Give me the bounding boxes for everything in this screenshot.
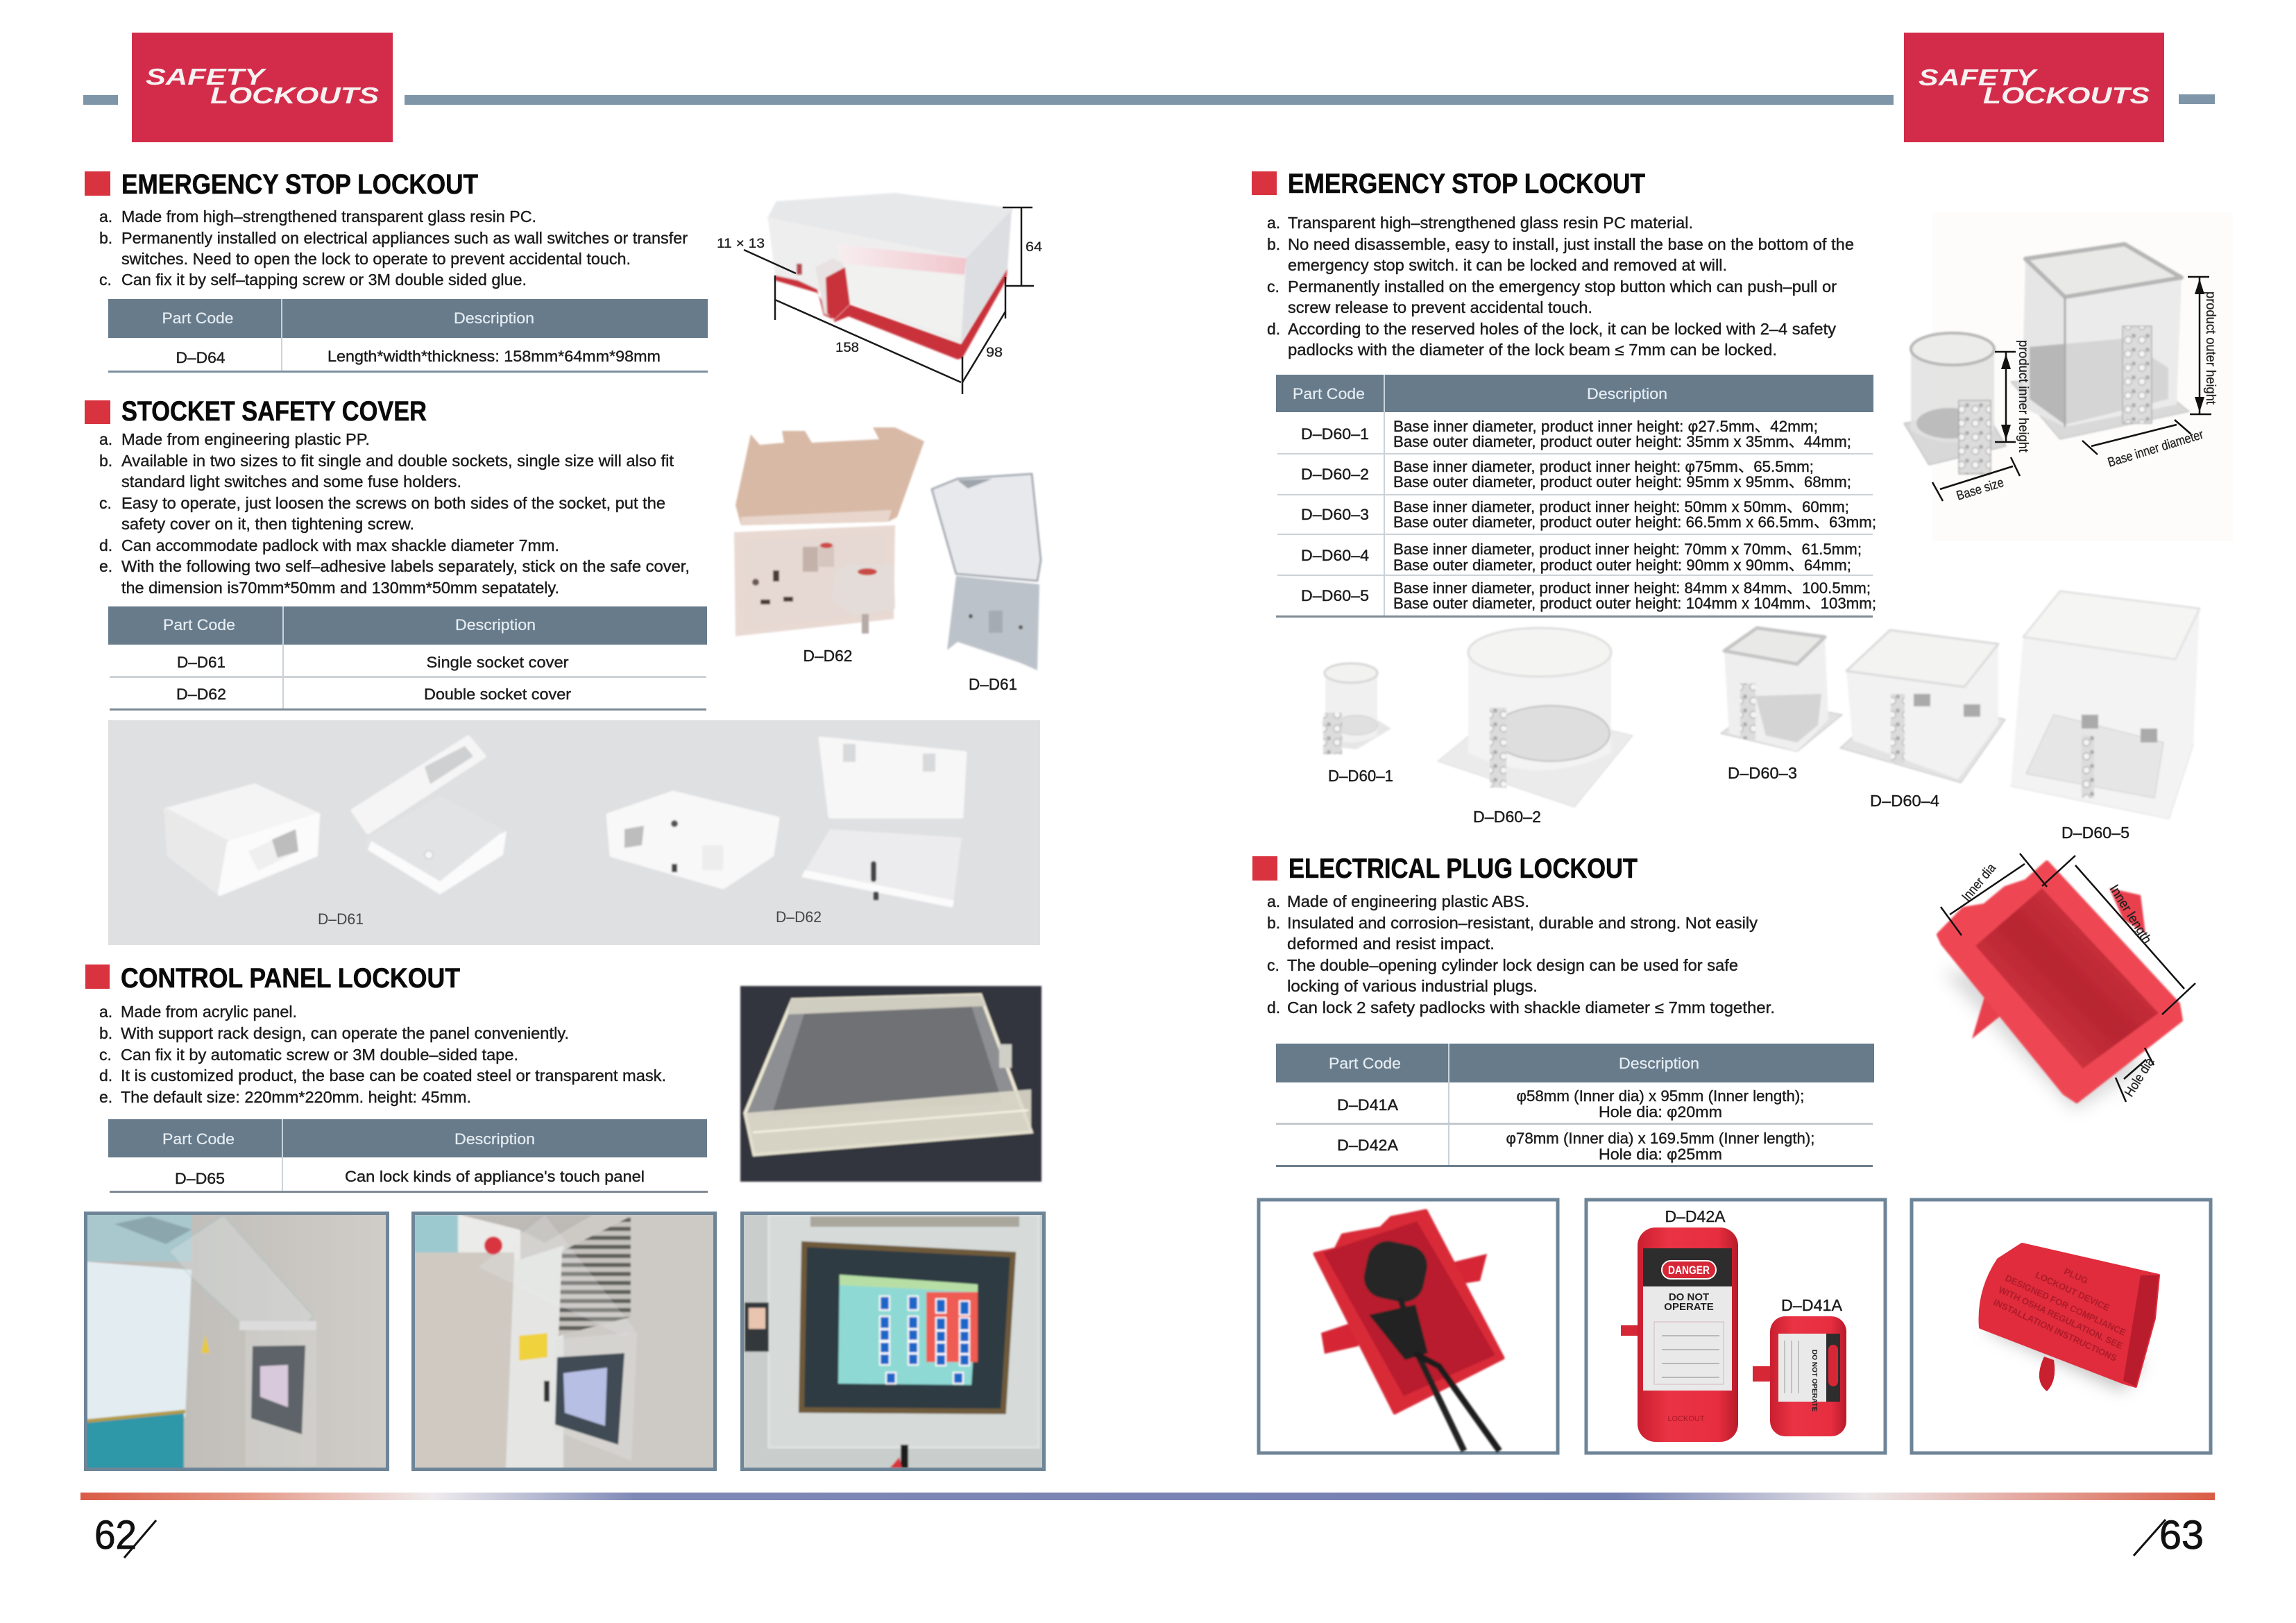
feature list: c. bbox=[99, 1046, 112, 1064]
part table D-D60 series: Base outer diameter, product outer height: 95mm x 95mm、68mm; bbox=[1393, 473, 1851, 491]
feature list: Permanently installed on electrical appliances such as wall switches or transfer bbox=[121, 229, 688, 247]
part table D-D60 series: D–D60–3 bbox=[1301, 506, 1369, 523]
part table D-D64: D–D64 bbox=[176, 349, 225, 366]
part table D-D41A D-D42A: D–D42A bbox=[1337, 1137, 1398, 1154]
part table D-D61 D-D62 bbox=[108, 606, 707, 711]
part table D-D60 series: Base inner diameter, product inner height: φ27.5mm、42mm; bbox=[1393, 418, 1818, 435]
part table D-D41A D-D42A: Part Code bbox=[1329, 1055, 1401, 1072]
part table D-D64: Description bbox=[454, 309, 534, 327]
product: D-D62 closed bbox=[609, 793, 777, 887]
part table D-D60 series: Base inner diameter, product inner height: 84mm x 84mm、100.5mm; bbox=[1393, 579, 1871, 597]
product: D-D60-4 bbox=[1840, 630, 2005, 783]
header: left page: SAFETY bbox=[146, 64, 267, 90]
feature list: With the following two self–adhesive labels separately, stick on the safe cover, bbox=[121, 557, 690, 575]
feature list: padlocks with the diameter of the lock beam ≤ 7mm can be locked. bbox=[1288, 341, 1777, 359]
feature list: b. bbox=[99, 1024, 112, 1042]
product drawing: dimensioned cylinder and cube bbox=[1904, 212, 2233, 541]
photo frame: closed red lockout bbox=[1912, 1200, 2211, 1453]
feature list: safety cover on it, then tightening screw. bbox=[121, 515, 414, 533]
part table D-D60 series: Base inner diameter, product inner height: 70mm x 70mm、61.5mm; bbox=[1393, 541, 1862, 558]
feature list: Can lock 2 safety padlocks with shackle diameter ≤ 7mm together. bbox=[1287, 999, 1775, 1017]
feature list: b. bbox=[1267, 914, 1280, 932]
header: right page bbox=[1904, 33, 2215, 142]
label: D-D60-4: D–D60–4 bbox=[1870, 792, 1939, 810]
feature list: The default size: 220mm*220mm. height: 45mm. bbox=[121, 1088, 471, 1106]
feature list: e. bbox=[99, 557, 112, 575]
part table D-D60 series: Base outer diameter, product outer height: 104mm x 104mm、103mm; bbox=[1393, 595, 1876, 612]
part table D-D61 D-D62: Double socket cover bbox=[424, 686, 571, 703]
feature list: c. bbox=[1267, 278, 1279, 296]
part table D-D61 D-D62: Description bbox=[455, 616, 536, 634]
feature list: locking of various industrial plugs. bbox=[1287, 977, 1538, 995]
product: D-D61 open bbox=[352, 737, 507, 894]
feature list: switches. Need to open the lock to operate to prevent accidental touch. bbox=[121, 250, 631, 268]
header: left page: LOCKOUTS bbox=[210, 83, 379, 108]
feature list: d. bbox=[1267, 320, 1280, 338]
part table D-D41A D-D42A bbox=[1276, 1044, 1874, 1167]
feature list: Made from engineering plastic PP. bbox=[121, 430, 370, 448]
feature list: Made of engineering plastic ABS. bbox=[1287, 892, 1529, 910]
part table D-D65: Description bbox=[454, 1130, 535, 1148]
label: D-D62: D–D62 bbox=[776, 908, 822, 926]
product drawing: D-D64 with dimensions: 64 bbox=[1026, 240, 1042, 255]
part table D-D60 series: Part Code bbox=[1293, 385, 1365, 402]
part table D-D64: Part Code bbox=[162, 309, 233, 327]
part table D-D65: D–D65 bbox=[175, 1170, 225, 1187]
page number 63: 63 bbox=[2159, 1513, 2204, 1558]
feature list: d. bbox=[99, 536, 112, 554]
feature list: Transparent high–strengthened glass resin PC material. bbox=[1288, 214, 1693, 232]
heading: control panel lockout: CONTROL PANEL LOCKOUT bbox=[121, 963, 460, 994]
feature list: standard light switches and some fuse holders. bbox=[121, 473, 461, 491]
photo 1: panel lock, open side view bbox=[84, 1212, 389, 1471]
part table D-D64 bbox=[108, 299, 708, 373]
label: D-D60-5: D–D60–5 bbox=[2061, 824, 2129, 842]
part table D-D41A D-D42A: Hole dia: φ25mm bbox=[1599, 1146, 1722, 1163]
feature list bbox=[99, 430, 690, 597]
panel: socket safety cover bbox=[85, 396, 1041, 945]
product: D-D42A cylinder bbox=[1621, 1227, 1738, 1442]
label: D-D61: D–D61 bbox=[969, 675, 1017, 693]
product drawing: dimensioned cylinder and cube: product inner height bbox=[2016, 340, 2030, 453]
part table D-D60 series: Base outer diameter, product outer height: 90mm x 90mm、64mm; bbox=[1393, 556, 1851, 574]
label: D-D61: D–D61 bbox=[318, 910, 364, 928]
product: D-D62 open bbox=[801, 738, 965, 908]
feature list: a. bbox=[1267, 892, 1280, 910]
feature list: According to the reserved holes of the lock, it can be locked with 2–4 safety bbox=[1288, 320, 1837, 338]
part table D-D61 D-D62: D–D62 bbox=[176, 686, 226, 703]
part table D-D41A D-D42A: Description bbox=[1619, 1055, 1699, 1072]
product photo: D-D61 single socket bbox=[932, 474, 1041, 670]
part table D-D65: Part Code bbox=[162, 1130, 235, 1148]
product drawing: dimensioned cylinder and cube: Base size bbox=[1955, 475, 2005, 504]
feature list: screw release to prevent accidental touch. bbox=[1288, 298, 1592, 316]
feature list: the dimension is70mm*50mm and 130mm*50mm sepatately. bbox=[121, 579, 559, 597]
part table D-D61 D-D62: Single socket cover bbox=[426, 654, 569, 671]
heading: emergency stop lockout: EMERGENCY STOP LOCKOUT bbox=[1288, 169, 1645, 199]
product drawing: D-D64 with dimensions bbox=[717, 194, 1042, 394]
part table D-D60 series: Description bbox=[1587, 385, 1667, 402]
feature list: No need disassemble, easy to install, just install the base on the bottom of the bbox=[1288, 235, 1854, 253]
part table D-D41A D-D42A: D–D41A bbox=[1337, 1096, 1398, 1114]
feature list: Can fix it by self–tapping screw or 3M double sided glue. bbox=[121, 271, 527, 289]
part table D-D60 series bbox=[1276, 375, 1876, 618]
part table D-D41A D-D42A: φ78mm (Inner dia) x 169.5mm (Inner length); bbox=[1506, 1130, 1815, 1147]
product drawing: open red plug lockout with dimensions: Inner dia bbox=[1959, 860, 1999, 904]
footer gradient bar bbox=[80, 1493, 2215, 1500]
feature list: c. bbox=[99, 271, 112, 289]
feature list: Insulated and corrosion–resistant, durable and strong. Not easily bbox=[1287, 914, 1758, 932]
feature list: b. bbox=[99, 229, 112, 247]
panel: emergency stop lockout D-D64 bbox=[85, 169, 1042, 394]
feature list: With support rack design, can operate the panel conveniently. bbox=[121, 1024, 569, 1042]
label: D-D42A: D–D42A bbox=[1665, 1207, 1726, 1225]
feature list: deformed and resist impact. bbox=[1287, 935, 1495, 953]
feature list: Made from acrylic panel. bbox=[121, 1003, 297, 1021]
part table D-D60 series: D–D60–4 bbox=[1301, 547, 1369, 564]
product photo: D-D62 double socket bbox=[734, 427, 924, 636]
heading: emergency stop lockout: EMERGENCY STOP LOCKOUT bbox=[121, 169, 478, 200]
part table D-D60 series: D–D60–1 bbox=[1301, 425, 1369, 443]
feature list: Can accommodate padlock with max shackle diameter 7mm. bbox=[121, 536, 559, 554]
feature list: Can fix it by automatic screw or 3M double–sided tape. bbox=[121, 1046, 518, 1064]
photo 3: panel lock front view with touch screen bbox=[740, 1212, 1046, 1471]
photo frame: upright red lockouts with danger tags bbox=[1586, 1200, 1885, 1453]
feature list: d. bbox=[99, 1067, 112, 1085]
photo frame: closed red lockout: DESIGNED FOR COMPLIANCE bbox=[2004, 1273, 2127, 1338]
product drawing: open red plug lockout with dimensions: Inner length bbox=[2107, 883, 2154, 946]
part table D-D60 series: D–D60–5 bbox=[1301, 587, 1369, 604]
label: D-D60-2: D–D60–2 bbox=[1473, 808, 1541, 826]
feature list: a. bbox=[99, 430, 112, 448]
photo frame: closed red lockout: INSTALLATION INSTRUCTIONS bbox=[1992, 1297, 2119, 1363]
heading: electrical plug lockout: ELECTRICAL PLUG LOCKOUT bbox=[1289, 853, 1638, 884]
product: D-D60-2 bbox=[1438, 628, 1633, 807]
panel: white covers on grey bbox=[108, 720, 1040, 945]
page number 63 bbox=[2134, 1513, 2204, 1558]
product drawing: dimensioned cylinder and cube: Base inner diameter bbox=[2106, 427, 2206, 470]
feature list: a. bbox=[1267, 214, 1280, 232]
panel: electrical plug lockout bbox=[1252, 853, 2211, 1453]
product: D-D60-1 bbox=[1322, 663, 1391, 754]
feature list: It is customized product, the base can be coated steel or transparent mask. bbox=[121, 1067, 666, 1085]
part table D-D60 series: Base inner diameter, product inner height: 50mm x 50mm、60mm; bbox=[1393, 498, 1849, 516]
part table D-D65: Can lock kinds of appliance's touch panel bbox=[345, 1168, 645, 1185]
photo 2: panel lock beside vent bbox=[411, 1212, 717, 1471]
product drawing: D-D64 with dimensions: 98 bbox=[986, 346, 1003, 360]
product: D-D61 closed bbox=[167, 786, 318, 894]
product drawing: open red plug lockout with dimensions: Hole dia bbox=[2122, 1055, 2157, 1100]
product: D-D42A cylinder: DO NOT bbox=[1669, 1291, 1709, 1303]
feature list: Easy to operate, just loosen the screws on both sides of the socket, put the bbox=[121, 494, 665, 512]
feature list: a. bbox=[99, 1003, 112, 1021]
page number 62: 62 bbox=[94, 1513, 137, 1558]
product: D-D42A cylinder: LOCKOUT bbox=[1667, 1415, 1705, 1423]
product: D-D60-5 bbox=[2011, 591, 2200, 819]
part table D-D60 series: Base outer diameter, product outer height: 66.5mm x 66.5mm、63mm; bbox=[1393, 513, 1876, 531]
feature list bbox=[1267, 892, 1775, 1017]
part table D-D64: Length*width*thickness: 158mm*64mm*98mm bbox=[328, 348, 661, 365]
feature list: c. bbox=[1267, 956, 1279, 974]
header: right page: LOCKOUTS bbox=[1983, 83, 2150, 108]
part table D-D60 series: D–D60–2 bbox=[1301, 466, 1369, 483]
product: D-D41A cylinder bbox=[1753, 1316, 1846, 1436]
part table D-D41A D-D42A: Hole dia: φ20mm bbox=[1599, 1103, 1722, 1121]
part table D-D60 series: Base inner diameter, product inner height: φ75mm、65.5mm; bbox=[1393, 458, 1814, 475]
feature list: b. bbox=[99, 452, 112, 470]
product: D-D42A cylinder: DANGER bbox=[1668, 1264, 1710, 1277]
product photo: acrylic panel cover bbox=[740, 986, 1041, 1182]
feature list bbox=[99, 1003, 666, 1106]
product: D-D41A cylinder: DO NOT OPERATE bbox=[1810, 1350, 1818, 1412]
part table D-D60 series: Base outer diameter, product outer height: 35mm x 35mm、44mm; bbox=[1393, 433, 1851, 450]
feature list: The double–opening cylinder lock design can be used for safe bbox=[1287, 956, 1738, 974]
label: D-D62: D–D62 bbox=[803, 647, 852, 665]
feature list: Available in two sizes to fit single and double sockets, single size will also fit bbox=[121, 452, 674, 470]
product: D-D42A cylinder: OPERATE bbox=[1664, 1301, 1714, 1313]
feature list bbox=[1267, 214, 1854, 359]
photo frame: closed red lockout: LOCKOUT DEVICE bbox=[2034, 1270, 2111, 1313]
feature list: a. bbox=[99, 207, 112, 226]
panel: control panel lockout bbox=[84, 963, 1046, 1471]
feature list: c. bbox=[99, 494, 112, 512]
label: D-D60-1: D–D60–1 bbox=[1328, 767, 1393, 785]
feature list: Permanently installed on the emergency stop button which can push–pull or bbox=[1288, 278, 1837, 296]
label: D-D41A: D–D41A bbox=[1781, 1296, 1843, 1314]
product drawing: D-D64 with dimensions: 11 × 13 bbox=[717, 237, 765, 251]
feature list: b. bbox=[1267, 235, 1280, 253]
product group: D-D60 sizes bbox=[1322, 591, 2200, 842]
part table D-D41A D-D42A: φ58mm (Inner dia) x 95mm (Inner length); bbox=[1517, 1087, 1804, 1105]
product drawing: D-D64 with dimensions: 158 bbox=[835, 341, 859, 355]
label: D-D60-3: D–D60–3 bbox=[1728, 764, 1797, 782]
part table D-D61 D-D62: D–D61 bbox=[177, 654, 226, 671]
feature list: emergency stop switch. it can be locked and removed at will. bbox=[1288, 256, 1727, 274]
photo frame: plug inside lockout bbox=[1259, 1200, 1558, 1453]
product drawing: dimensioned cylinder and cube: product outer height bbox=[2203, 291, 2218, 405]
header: left page bbox=[83, 33, 1894, 142]
photo frame: closed red lockout: PLUG bbox=[2062, 1266, 2089, 1286]
header: right page: SAFETY bbox=[1919, 65, 2039, 90]
part table D-D65 bbox=[108, 1119, 708, 1193]
feature list: d. bbox=[1267, 999, 1280, 1017]
photo frame: closed red lockout: WITH OSHA REGULATION. SEE bbox=[1997, 1284, 2125, 1351]
product drawing: open red plug lockout with dimensions bbox=[1939, 853, 2195, 1110]
feature list bbox=[99, 207, 688, 289]
product: D-D60-3 bbox=[1721, 628, 1842, 751]
panel: emergency stop lockout D-D60 bbox=[1252, 169, 2233, 842]
heading: stocket safety cover: STOCKET SAFETY COVER bbox=[121, 396, 427, 427]
feature list: Made from high–strengthened transparent glass resin PC. bbox=[121, 207, 536, 226]
part table D-D61 D-D62: Part Code bbox=[163, 616, 235, 634]
feature list: e. bbox=[99, 1088, 112, 1106]
